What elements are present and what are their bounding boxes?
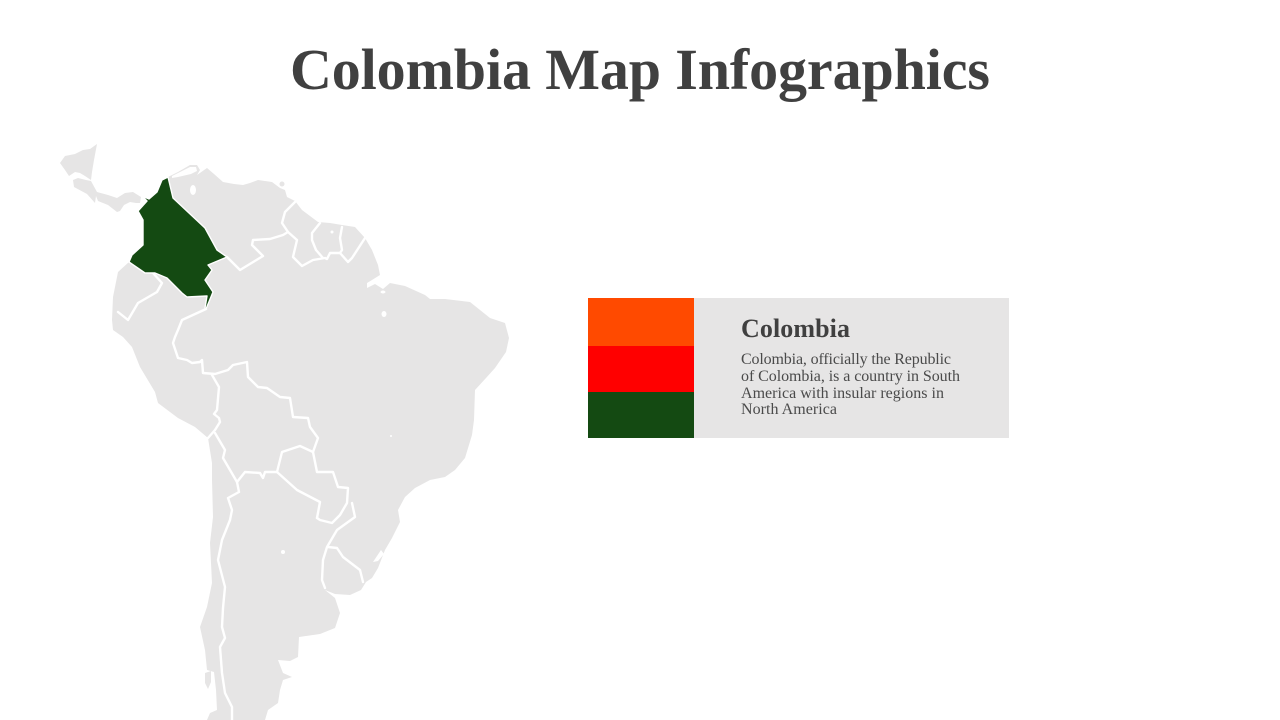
card body text: North America: [741, 401, 837, 418]
Chiloe island: [205, 671, 211, 689]
flag stripe: orange: [588, 298, 694, 346]
card background: [694, 298, 1009, 438]
Central America north landmass: [60, 144, 97, 180]
panel: Colombia info card: [588, 298, 1009, 438]
country borders: [118, 202, 365, 720]
card body text: [741, 351, 960, 418]
map: South America: [60, 144, 509, 720]
Colombia highlighted: [129, 177, 227, 309]
lakes and inland holes: [172, 167, 392, 562]
card body text: Colombia, officially the Republic: [741, 351, 951, 368]
card heading: Colombia: [741, 314, 850, 343]
continent landmass: [112, 165, 509, 720]
title: Colombia Map Infographics: [290, 37, 990, 102]
flag stripe: green: [588, 392, 694, 438]
Trinidad island: [280, 182, 284, 186]
card body text: of Colombia, is a country in South: [741, 368, 960, 385]
card body text: America with insular regions in: [741, 385, 944, 402]
Central America south landmass: [73, 178, 141, 212]
flag stripe: red: [588, 346, 694, 392]
